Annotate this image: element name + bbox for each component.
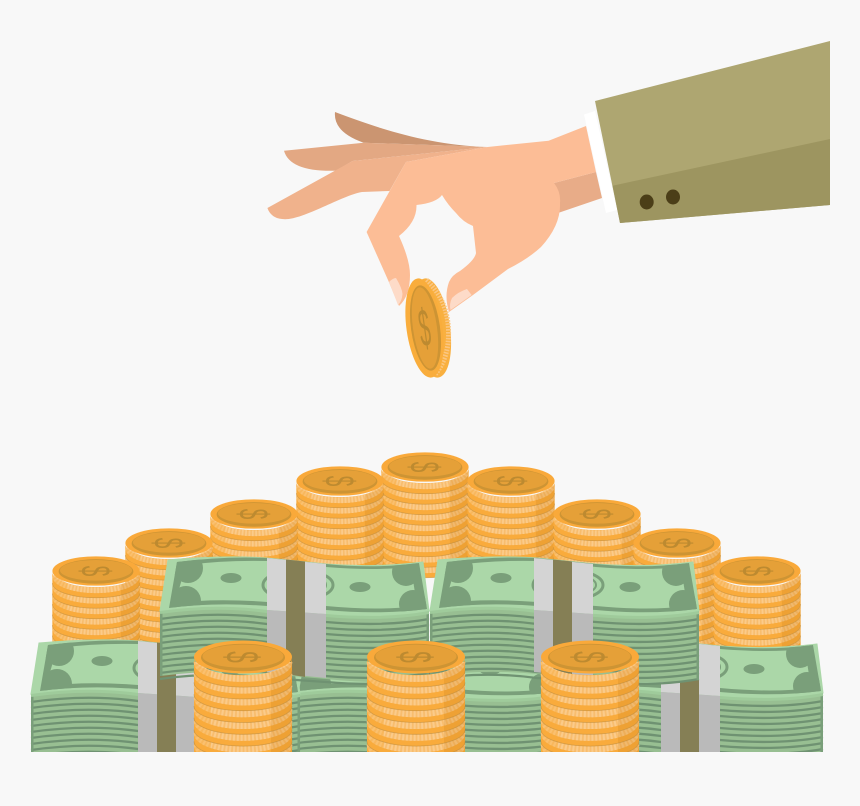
- hand and pinching fingers: [367, 126, 596, 312]
- coin stack back 8: [52, 556, 140, 642]
- banknote bundle middle left: [160, 553, 429, 684]
- coin stack back 6: $: [146, 538, 192, 548]
- coin stack front left: $: [216, 651, 269, 663]
- banknote bundle front left: [30, 639, 300, 752]
- falling coin: [400, 276, 457, 380]
- coin stack back 2: [296, 466, 384, 566]
- coin stack front centre: [366, 640, 466, 752]
- shirt cuff: [584, 111, 617, 213]
- dollar sign: $: [415, 299, 434, 358]
- coin stack back 4: [210, 499, 298, 560]
- banknote bundle middle right: [430, 553, 699, 684]
- coin stack back 3: [467, 466, 555, 560]
- coin stack back 9: $: [734, 566, 780, 576]
- coin stack back 3: $: [488, 476, 534, 486]
- thumbnail: [450, 289, 472, 310]
- jacket sleeve: [595, 41, 830, 223]
- coin stack back 5: [553, 499, 641, 566]
- ring finger: [284, 143, 488, 171]
- coin stack back 5: $: [574, 509, 620, 519]
- coin stack back 2: $: [317, 476, 363, 486]
- index fingernail: [389, 278, 402, 305]
- coin stack back 1: $: [402, 462, 448, 472]
- coin stack back 1: [381, 452, 469, 578]
- banknote bundle front middle: [298, 672, 541, 752]
- little finger: [335, 112, 488, 147]
- coin stack front right: $: [563, 651, 616, 663]
- middle finger: [267, 147, 488, 219]
- coin stack front left: [194, 640, 292, 752]
- coin stack back 8: $: [73, 566, 119, 576]
- coin stack back 7: [633, 528, 721, 654]
- wrist shadow: [554, 172, 602, 213]
- coin stack front centre: $: [389, 651, 442, 663]
- coin stack front right: [540, 640, 640, 752]
- banknote bundle front right: [639, 643, 824, 752]
- hand holding coin: [267, 41, 830, 312]
- coin stack back 6: [125, 528, 213, 654]
- coin stack back 9: [713, 556, 801, 648]
- coin stack back 7: $: [654, 538, 700, 548]
- money pile: [31, 452, 823, 782]
- coin stack back 4: $: [231, 509, 277, 519]
